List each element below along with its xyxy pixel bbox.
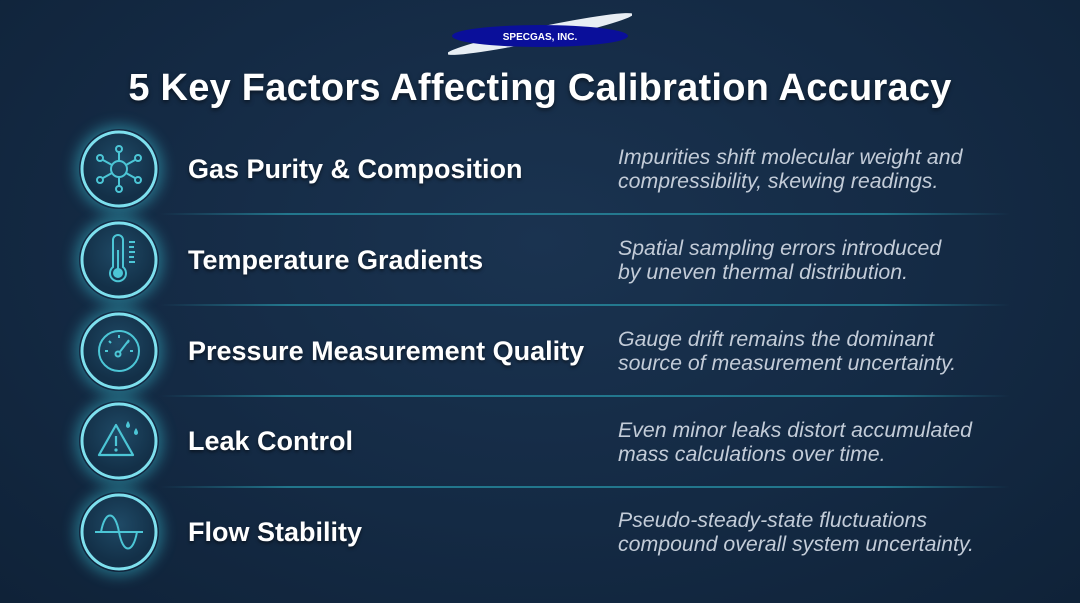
logo: SPECGAS, INC.	[503, 32, 577, 43]
description 2	[618, 236, 942, 284]
description 4	[618, 418, 972, 466]
description 3: Gauge drift remains the dominant	[618, 327, 934, 351]
icon: leak warning	[79, 401, 159, 481]
icon: molecule	[79, 129, 159, 209]
heading 1: Gas Purity & Composition	[188, 154, 523, 184]
description 3	[618, 327, 956, 375]
icon: sine wave	[79, 492, 159, 572]
icon: gauge	[79, 311, 159, 391]
description 1: compressibility, skewing readings.	[618, 169, 938, 193]
description 4: Even minor leaks distort accumulated	[618, 418, 972, 442]
description 2: by uneven thermal distribution.	[618, 260, 908, 284]
heading 2: Temperature Gradients	[188, 245, 483, 275]
heading 5: Flow Stability	[188, 517, 362, 547]
heading 4: Leak Control	[188, 426, 353, 456]
description 1	[618, 145, 963, 193]
description 4: mass calculations over time.	[618, 442, 886, 466]
description 5: Pseudo-steady-state fluctuations	[618, 508, 927, 532]
description 2: Spatial sampling errors introduced	[618, 236, 941, 260]
icon: thermometer	[79, 220, 159, 300]
heading 3: Pressure Measurement Quality	[188, 336, 584, 366]
logo	[448, 13, 632, 55]
description 5	[618, 508, 974, 556]
description 5: compound overall system uncertainty.	[618, 532, 974, 556]
title: 5 Key Factors Affecting Calibration Accuracy	[128, 67, 952, 109]
description 3: source of measurement uncertainty.	[618, 351, 956, 375]
description 1: Impurities shift molecular weight and	[618, 145, 962, 169]
